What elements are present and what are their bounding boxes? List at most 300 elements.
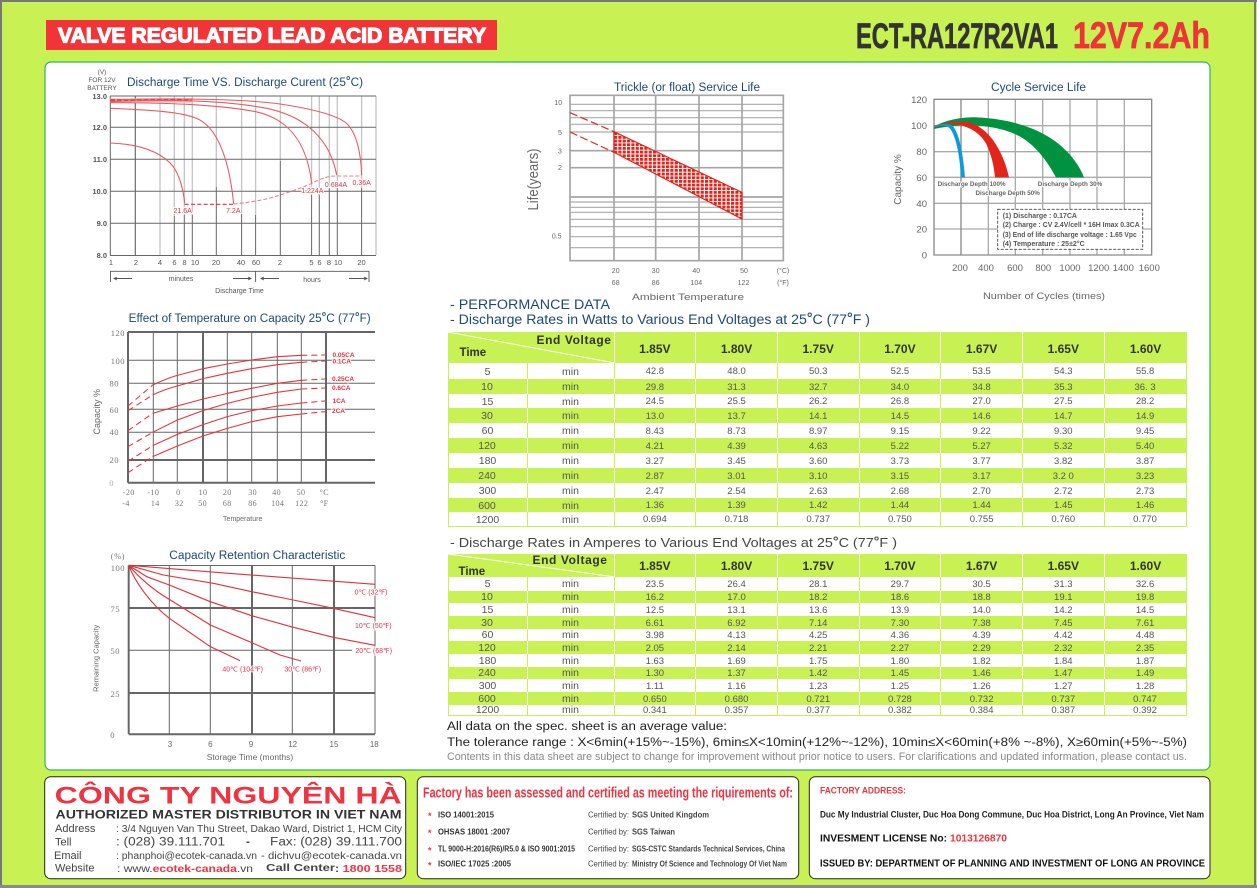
discharge rate labels: 0.25CA — [332, 376, 354, 383]
life axis — [552, 100, 562, 240]
table: discharge rates in amperes: min — [562, 591, 579, 603]
table: discharge rates in watts: 8.97 — [809, 426, 827, 436]
time axis: 10 — [334, 258, 342, 267]
temperature axis: 50 — [297, 488, 305, 497]
certification list: * — [428, 860, 432, 870]
heading: performance data: - PERFORMANCE DATA — [450, 297, 610, 312]
certifying bodies: SGS-CSTC Standards Technical Services, China — [632, 845, 785, 854]
license number — [820, 833, 1007, 845]
license number: 1013126870 — [950, 833, 1007, 845]
storage time axis — [168, 740, 379, 749]
voltage axis: 12.0 — [92, 123, 107, 132]
table: discharge rates in amperes: 6.61 — [646, 618, 664, 628]
time axis: 8 — [182, 258, 187, 267]
table: discharge rates in watts: 0.718 — [725, 514, 748, 525]
ambient temperature axis: 104 — [690, 280, 702, 287]
header label: time: Time — [458, 566, 485, 578]
header diagonal — [448, 554, 614, 577]
voltage axis: 8.0 — [97, 251, 107, 260]
voltage axis caption: FOR 12V — [88, 77, 116, 84]
certification list — [428, 810, 575, 870]
axis titles: Storage Time (months) — [207, 752, 293, 762]
table: discharge rates in watts: 9.22 — [972, 426, 991, 436]
notes on tolerance: All data on the spec. sheet is an average value: — [447, 721, 727, 733]
discharge rate labels: 2CA — [332, 408, 345, 415]
table: discharge rates in watts: 14.5 — [891, 410, 909, 422]
chart title: Effect of Temperature on Capacity 25 — [129, 313, 318, 325]
header label: end voltage: End Voltage — [532, 553, 608, 567]
table: discharge rates in amperes: 18.2 — [809, 592, 827, 603]
chart: trickle service life: Ambient Temperature — [632, 292, 744, 303]
table: discharge rates in watts: min — [562, 381, 579, 393]
table: discharge rates in amperes: 26.4 — [727, 579, 746, 590]
table: discharge rates in amperes: 0.747 — [1133, 694, 1157, 704]
table: discharge rates in amperes: 23.5 — [646, 579, 664, 590]
table: discharge rates in amperes: 1.49 — [1136, 668, 1154, 679]
table: discharge rates in watts: 600 — [478, 500, 496, 512]
table: discharge rates in amperes: 0.382 — [888, 705, 912, 716]
discharge rate labels: 0.1CA — [332, 358, 351, 365]
table: discharge rates in amperes: 4.42 — [1054, 630, 1073, 641]
contact labels: Tell — [55, 837, 72, 849]
temperature labels — [222, 590, 392, 674]
table: discharge rates in watts: 2.54 — [727, 486, 746, 496]
table: discharge rates in watts: 120 — [478, 440, 496, 452]
table: discharge rates in watts: 5.22 — [891, 440, 909, 452]
table: discharge rates in amperes: 12.5 — [646, 604, 664, 616]
table: discharge rates in amperes: 0.737 — [1051, 694, 1075, 704]
table: discharge rates in amperes: 17.0 — [727, 592, 746, 603]
table: discharge rates in watts: 28.2 — [1136, 396, 1154, 407]
notes on tolerance: Contents in this data sheet are subject to change for improvement without prior notice to users. For clarifications and updated information, please contact us. — [447, 751, 1187, 763]
chart title: C (77 — [326, 313, 355, 325]
table: discharge rates in amperes: 0.357 — [725, 705, 748, 716]
table: discharge rates in amperes: 2.05 — [646, 642, 664, 654]
table: discharge rates in watts: 1.80V — [721, 342, 752, 356]
header label: end voltage: End Voltage — [536, 333, 612, 347]
table: discharge rates in watts: min — [562, 514, 579, 526]
certification list: OHSAS 18001 :2007 — [438, 827, 511, 836]
heading: amperes table: F ) — [879, 535, 897, 550]
axis titles: Life(years) — [525, 148, 542, 210]
capacity axis — [911, 95, 927, 262]
table: discharge rates in amperes: 1.82 — [972, 656, 991, 666]
chart: capacity retention characteristic — [92, 550, 392, 762]
retention axis: 0 — [110, 730, 115, 740]
cycles axis: 1200 — [1088, 263, 1109, 274]
table: discharge rates in amperes: 31.3 — [1054, 579, 1073, 590]
certification list: * — [428, 828, 432, 838]
table: discharge rates in watts: 52.5 — [891, 366, 909, 377]
table: discharge rates in amperes: 0.650 — [643, 694, 667, 704]
table: discharge rates in amperes: 7.38 — [972, 618, 991, 628]
retention axis: 100 — [111, 563, 125, 573]
contact details: : www. ecotek-canada .vn — [117, 863, 253, 875]
table: discharge rates in watts — [448, 332, 1187, 527]
table: discharge rates in watts: 1.42 — [809, 500, 827, 511]
table: discharge rates in amperes: 1.16 — [727, 680, 746, 692]
table: discharge rates in amperes: 0.387 — [1051, 705, 1075, 716]
table: discharge rates in amperes: 7.61 — [1136, 618, 1154, 628]
certification list: ISO/IEC 17025 :2005 — [438, 860, 512, 869]
contact details: : 1800 1558 — [335, 863, 402, 875]
table: discharge rates in amperes: 0.732 — [970, 694, 993, 704]
time axis: 40 — [237, 258, 245, 267]
temperature axis: 122 — [295, 499, 308, 508]
table: discharge rates in watts: 4.39 — [727, 440, 746, 452]
table: discharge rates in amperes: 1.87 — [1136, 656, 1154, 666]
table: discharge rates in watts: 3.10 — [809, 470, 827, 482]
time axis — [109, 258, 366, 267]
chart title: Trickle (or float) Service Life — [614, 82, 760, 94]
table: discharge rates in watts: 1.44 — [972, 500, 991, 511]
table: discharge rates in watts: 1.70V — [884, 342, 916, 356]
current labels: 0.36A — [353, 180, 371, 187]
test conditions box: (2) Charge : CV 2.4V/cell * 16H Imax 0.3CA — [1003, 222, 1140, 229]
table: discharge rates in watts: 34.0 — [891, 382, 909, 392]
certifying bodies: SGS United Kingdom — [632, 810, 709, 819]
table: discharge rates in amperes: min — [562, 654, 579, 666]
table: discharge rates in amperes: 1.47 — [1054, 668, 1073, 679]
table: discharge rates in amperes: 14.2 — [1054, 604, 1073, 616]
temperature axis: 32 — [175, 499, 184, 508]
table: discharge rates in watts: 3.2 0 — [1053, 470, 1074, 482]
chart title: F) — [360, 313, 371, 325]
voltage axis — [92, 92, 107, 260]
heading: performance data: ° — [807, 310, 812, 326]
temperature labels: 20℃ (68℉) — [355, 648, 392, 655]
depth labels — [938, 181, 1103, 197]
current labels — [174, 180, 371, 215]
table: discharge rates in amperes: 1.23 — [809, 680, 827, 692]
temperature axis: -20 — [123, 488, 135, 497]
temperature axis: 40 — [272, 488, 281, 497]
table: discharge rates in watts: 3.87 — [1136, 456, 1154, 466]
cycles axis: 1400 — [1113, 263, 1134, 274]
heading: performance data: F ) — [853, 312, 870, 327]
temperature axis: 10 — [199, 488, 207, 497]
table: discharge rates in watts: 240 — [478, 470, 496, 482]
minutes and hours brackets — [110, 271, 369, 282]
issuing department: ISSUED BY: DEPARTMENT OF PLANNING AND INVESTMENT OF LONG AN PROVINCE — [820, 858, 1205, 870]
temperature axis: -4 — [122, 499, 130, 508]
capacity axis: 40 — [916, 199, 927, 210]
table: discharge rates in watts: 14.6 — [972, 410, 991, 422]
temperature axis: 68 — [223, 499, 232, 508]
table: discharge rates in watts: 55.8 — [1136, 366, 1154, 377]
capacity axis: 0 — [922, 250, 927, 262]
table: discharge rates in watts: 0.694 — [643, 514, 667, 525]
table: discharge rates in amperes: 32.6 — [1136, 579, 1154, 590]
table: discharge rates in watts: 3.17 — [972, 470, 991, 482]
table: discharge rates in amperes: 0.392 — [1133, 705, 1157, 716]
axis titles: Capacity % — [92, 389, 102, 434]
temperature axis: °F — [320, 499, 329, 508]
table: discharge rates in watts: 1.85V — [639, 342, 671, 356]
table: discharge rates in amperes: 4.25 — [809, 630, 827, 641]
table: discharge rates in watts: 2.70 — [972, 486, 991, 496]
cycles axis: 1600 — [1139, 263, 1160, 274]
chart: effect of temperature on capacity — [92, 312, 375, 523]
chart title: ° — [355, 312, 360, 324]
model number and rating: ECT-RA127R2VA1 — [856, 17, 1058, 56]
table: discharge rates in watts: 8.73 — [727, 426, 746, 436]
voltage axis caption: (V) — [98, 69, 106, 76]
voltage axis caption — [87, 69, 117, 92]
life axis: 2 — [558, 165, 562, 172]
ambient temperature axis: 86 — [652, 280, 660, 287]
table: discharge rates in watts: 0.760 — [1051, 514, 1075, 525]
heading: amperes table: C (77 — [839, 535, 874, 550]
retention axis: 50 — [110, 646, 120, 656]
chart title: ° — [322, 312, 327, 324]
test conditions box: (1) Discharge : 0.17CA — [1003, 213, 1077, 220]
temperature axis: 14 — [151, 499, 160, 508]
ambient temperature axis: 30 — [652, 268, 660, 275]
time axis: 4 — [158, 258, 162, 267]
heading: performance data: C (77 — [812, 312, 847, 327]
life axis: 0.5 — [552, 234, 562, 240]
table: discharge rates in watts: 3.60 — [809, 456, 827, 466]
table: discharge rates in watts: 13.7 — [727, 410, 746, 422]
voltage axis: 9.0 — [97, 219, 107, 228]
table: discharge rates in amperes: 13.6 — [809, 604, 827, 616]
table: discharge rates in amperes — [448, 553, 1187, 716]
table: discharge rates in amperes: 13.1 — [727, 604, 746, 616]
table: discharge rates in amperes: 19.8 — [1136, 592, 1154, 603]
contact labels: Address — [55, 823, 96, 835]
table: discharge rates in amperes: 19.1 — [1054, 592, 1073, 603]
table: discharge rates in watts: 9.15 — [891, 426, 909, 436]
table: discharge rates in watts: 1.65V — [1048, 342, 1079, 356]
table: discharge rates in watts: 14.7 — [1054, 410, 1073, 422]
table: discharge rates in amperes: min — [562, 616, 579, 628]
notes on tolerance — [447, 721, 1187, 763]
table: discharge rates in watts: 3.15 — [891, 470, 909, 482]
table: discharge rates in amperes: 2.21 — [809, 642, 827, 654]
chart: discharge time vs discharge current: hours — [303, 277, 321, 284]
table: discharge rates in amperes: 1.60V — [1130, 559, 1161, 573]
certifying bodies: Certified by: — [588, 810, 629, 819]
table: discharge rates in watts: 1.39 — [727, 500, 746, 511]
table: discharge rates in watts: 9.30 — [1054, 426, 1073, 436]
heading: performance data: - Discharge Rates in Watts to Various End Voltages at 25 — [450, 312, 791, 327]
table: discharge rates in watts: min — [562, 366, 579, 378]
panel: main data sheet — [45, 62, 1210, 770]
table: discharge rates in amperes: 2.27 — [891, 642, 909, 654]
table: discharge rates in amperes: 1.30 — [646, 668, 664, 679]
time axis: 5 — [309, 258, 314, 267]
table: discharge rates in watts: 27.0 — [972, 396, 991, 407]
table: discharge rates in watts: 14.1 — [809, 410, 827, 422]
table: discharge rates in watts: min — [562, 500, 579, 512]
table: discharge rates in amperes: 1.25 — [891, 680, 909, 692]
table: discharge rates in amperes: 0.384 — [970, 705, 993, 716]
certifying bodies: Certified by: — [588, 827, 629, 836]
capacity axis: 20 — [110, 455, 119, 465]
table: discharge rates in amperes: 0.728 — [888, 694, 912, 704]
temperature axis: °C — [320, 488, 329, 497]
table: discharge rates in watts: 5.32 — [1054, 440, 1073, 452]
table: discharge rates in amperes: 6.92 — [727, 618, 746, 628]
contact labels: Email — [54, 850, 82, 862]
table: discharge rates in amperes: 1.11 — [646, 680, 664, 692]
table: discharge rates in amperes: 1.70V — [884, 559, 916, 573]
ambient temperature axis: 122 — [738, 280, 749, 287]
time axis: 20 — [357, 258, 366, 267]
time axis: 2 — [134, 258, 138, 267]
table: discharge rates in amperes: 1.28 — [1136, 680, 1154, 692]
panel: factory certifications — [417, 777, 799, 879]
table: discharge rates in amperes: 1.26 — [972, 680, 991, 692]
heading: amperes table: - Discharge Rates in Amperes to Various End Voltages at 25 — [450, 535, 797, 550]
chart: effect of temperature on capacity: Temperature — [223, 516, 262, 523]
ambient temperature axis: 68 — [612, 280, 620, 287]
ambient temperature axis: (°F) — [777, 279, 789, 287]
table: discharge rates in amperes: 4.13 — [727, 630, 746, 641]
chart title: C) — [351, 77, 363, 89]
table: discharge rates in amperes: 10 — [481, 591, 493, 603]
chart: cycle service life: Number of Cycles (times) — [983, 291, 1105, 302]
heading: performance data — [450, 297, 870, 327]
ambient temperature axis: 20 — [612, 268, 620, 275]
table: discharge rates in amperes: 16.2 — [646, 592, 664, 603]
table: discharge rates in amperes: min — [562, 667, 579, 679]
temperature axis: 20 — [223, 488, 232, 497]
temperature labels: 10℃ (50℉) — [355, 623, 392, 630]
table: discharge rates in watts: 9.45 — [1136, 426, 1154, 436]
table: discharge rates in amperes: 7.14 — [809, 618, 827, 628]
depth labels: Discharge Depth 30% — [1038, 181, 1103, 188]
voltage axis caption: BATTERY — [87, 85, 117, 92]
life axis: 3 — [558, 148, 562, 156]
certification list: ISO 14001:2015 — [438, 810, 495, 819]
voltage axis: 10.0 — [92, 187, 107, 196]
certification list: * — [428, 846, 432, 856]
table: discharge rates in amperes: min — [562, 680, 579, 692]
table: discharge rates in watts: 1.46 — [1136, 500, 1154, 511]
certifying bodies: Certified by: — [588, 860, 629, 869]
ambient temperature axis — [612, 267, 789, 287]
table: discharge rates in watts: 0.755 — [970, 514, 993, 525]
table: discharge rates in amperes: min — [562, 629, 579, 641]
table: discharge rates in amperes: min — [562, 642, 579, 654]
capacity curves — [128, 355, 325, 473]
table: discharge rates in amperes: 7.45 — [1054, 618, 1073, 628]
discharge rate labels: 1CA — [332, 398, 346, 405]
table: discharge rates in watts: 50.3 — [809, 366, 827, 377]
table: discharge rates in watts: 3.23 — [1136, 470, 1154, 482]
capacity axis: 80 — [916, 147, 927, 158]
storage time axis: 6 — [208, 740, 213, 749]
table: discharge rates in watts: 0.770 — [1133, 514, 1157, 525]
panel: factory address — [809, 777, 1210, 879]
table: discharge rates in amperes: 1.75 — [809, 656, 827, 666]
table: discharge rates in watts: 31.3 — [727, 382, 746, 392]
contact details: - — [246, 837, 250, 849]
certification heading: Factory has been assessed and certified as meeting the riquirements of: — [423, 785, 793, 802]
current labels: 1.224A — [301, 188, 324, 195]
ambient temperature axis: 40 — [692, 268, 700, 275]
table: discharge rates in amperes: 1.75V — [803, 559, 834, 573]
table: discharge rates in watts: 3.73 — [891, 456, 909, 466]
cycles axis: 600 — [1007, 263, 1023, 274]
discharge rate labels: 0.05CA — [332, 352, 355, 359]
retention axis: (%) — [111, 551, 125, 561]
table: discharge rates in watts: 8.43 — [646, 426, 664, 436]
time axis: 8 — [327, 258, 331, 267]
license number: INVESMENT LICENSE No: — [820, 833, 947, 845]
heading: performance data: ° — [847, 310, 853, 326]
discharge curves — [110, 98, 362, 204]
table: discharge rates in amperes: 1.37 — [727, 668, 746, 679]
temperature labels: 40℃ (104℉) — [222, 666, 263, 674]
table: discharge rates in amperes: 28.1 — [809, 579, 827, 590]
table: discharge rates in watts: 27.5 — [1054, 396, 1073, 407]
storage time axis: 9 — [249, 740, 254, 749]
table: discharge rates in watts: min — [562, 455, 579, 467]
test conditions box: (3) End of life discharge voltage : 1.65 Vpc — [1003, 232, 1137, 239]
capacity axis: 20 — [916, 224, 927, 236]
header label: time: Time — [460, 347, 486, 359]
table: discharge rates in watts: 25.5 — [727, 396, 746, 407]
notes on tolerance: The tolerance range : X<6min(+15%~-15%), 6min≤X<10min(+12%~-12%), 10min≤X<60min(+8% ~-8%), X≥60min(+5%~-5%) — [447, 737, 1187, 749]
banner: product type: VALVE REGULATED LEAD ACID BATTERY — [58, 24, 486, 48]
heading: amperes table: ° — [874, 534, 879, 548]
table: discharge rates in watts: 36. 3 — [1134, 382, 1156, 392]
company name: CÔNG TY NGUYÊN HÀ — [55, 781, 402, 809]
table: discharge rates in watts: 15 — [482, 396, 493, 408]
chart: discharge time vs discharge current — [87, 69, 376, 295]
voltage axis: 11.0 — [93, 155, 107, 164]
table: discharge rates in watts: 0.737 — [806, 514, 830, 525]
capacity axis: 60 — [916, 173, 927, 184]
table: discharge rates in watts: 35.3 — [1054, 382, 1073, 392]
table: discharge rates in watts: min — [562, 470, 579, 482]
table: discharge rates in watts: 26.2 — [809, 396, 827, 407]
capacity axis — [109, 328, 125, 488]
table: discharge rates in amperes: 120 — [478, 642, 496, 654]
table: discharge rates in watts: 3.01 — [727, 470, 746, 482]
cycles axis: 200 — [952, 263, 968, 274]
address heading: FACTORY ADDRESS: — [820, 785, 906, 795]
table: discharge rates in amperes: 14.0 — [972, 604, 991, 616]
life axis: 10 — [554, 100, 562, 107]
capacity axis: 120 — [111, 328, 125, 338]
table: discharge rates in amperes: 1.69 — [727, 656, 746, 666]
temperature axis: 0 — [176, 488, 181, 497]
temperature axis: 30 — [248, 488, 257, 497]
storage time axis: 18 — [370, 740, 379, 749]
storage time axis: 15 — [330, 740, 339, 749]
table: discharge rates in amperes: 2.35 — [1136, 642, 1154, 654]
table: discharge rates in watts: 3.77 — [972, 456, 991, 466]
table: discharge rates in amperes: 1.84 — [1054, 656, 1073, 666]
capacity axis: 100 — [111, 356, 125, 366]
table: discharge rates in amperes: 0.341 — [643, 705, 667, 716]
table: discharge rates in watts: 42.8 — [646, 366, 664, 377]
100 percent depth band — [934, 124, 965, 177]
test conditions box — [998, 209, 1143, 249]
contact details: : phanphoi@ecotek-canada.vn — [116, 851, 257, 862]
chart: cycle service life — [893, 82, 1160, 302]
table: discharge rates in watts: 34.8 — [972, 382, 991, 392]
cycles axis — [952, 263, 1160, 274]
table: discharge rates in amperes: 4.48 — [1136, 630, 1154, 641]
table: discharge rates in watts: 2.72 — [1054, 486, 1073, 496]
time axis: 60 — [252, 258, 260, 267]
table: discharge rates in amperes: 1200 — [476, 704, 499, 716]
